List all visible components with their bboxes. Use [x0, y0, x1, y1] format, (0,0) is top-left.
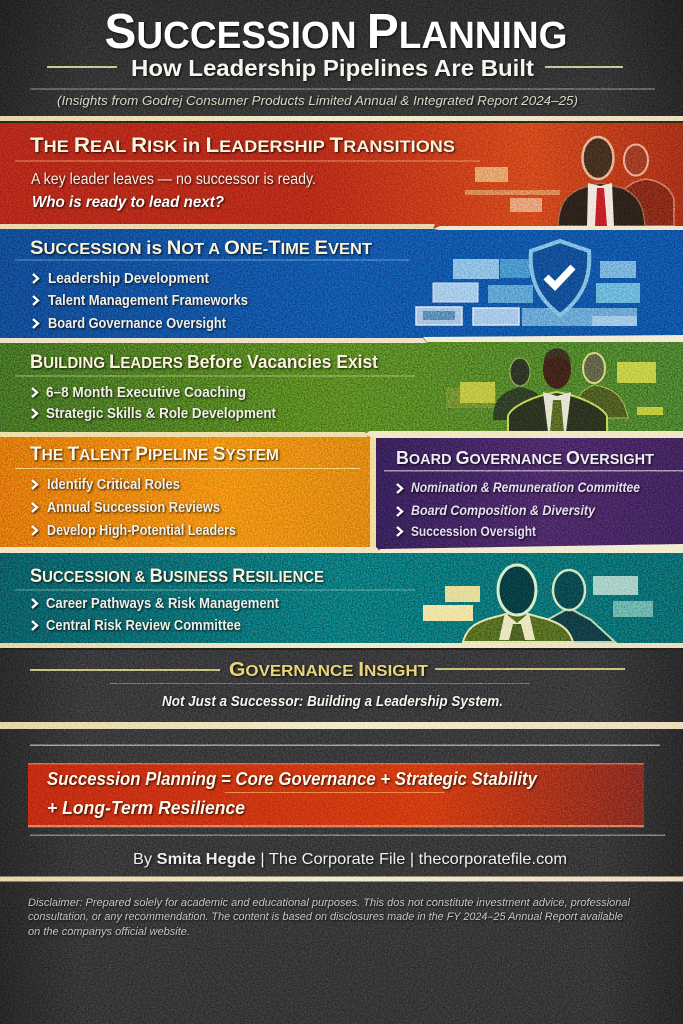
list: coaching bullets: 6–8 Month Executive Coaching [46, 385, 246, 401]
text: insight line: Not Just a Successor: Building a Leadership System. [162, 693, 503, 710]
heading: real risk: THE REAL RISK in LEADERSHIP TRANSITIONS [30, 134, 455, 157]
divider band [0, 876, 683, 882]
panel: blue not a one-time event [0, 228, 683, 340]
list: board bullets: Succession Oversight [411, 523, 536, 539]
decorative bands [0, 116, 683, 650]
list: event bullets: Board Governance Oversight [48, 316, 226, 332]
header [30, 5, 655, 108]
disclaimer [28, 897, 631, 938]
list: event bullets: Talent Management Frameworks [48, 293, 248, 309]
disclaimer: consultation, or any recommendation. The content is based on disclosures made in the FY 2024–25 Annual Report available [28, 911, 623, 923]
list: board bullets: Board Composition & Diversity [411, 502, 596, 518]
list: resilience bullets: Central Risk Review Committee [46, 618, 241, 634]
list: pipeline bullets: Identify Critical Roles [47, 477, 180, 493]
illustration: shield and framework boxes [416, 241, 640, 326]
heading: building leaders: BUILDING LEADERS Before Vacancies Exist [30, 352, 378, 373]
list: event bullets: Leadership Development [48, 271, 209, 287]
panel: green building leaders [0, 340, 683, 436]
list: coaching bullets: Strategic Skills & Role Development [46, 406, 276, 422]
illustration: three leaders [446, 348, 663, 432]
heading: resilience: SUCCESSION & BUSINESS RESILIENCE [30, 566, 324, 587]
list: resilience bullets: Career Pathways & Risk Management [46, 596, 279, 612]
heading: talent pipeline: THE TALENT PIPELINE SYSTEM [30, 444, 279, 465]
subtitle: How Leadership Pipelines Are Built [131, 55, 534, 81]
title: SUCCESSION PLANNING [104, 5, 568, 59]
byline: By Smita Hegde | The Corporate File | thecorporatefile.com [133, 851, 567, 868]
list: coaching bullets [32, 385, 276, 422]
list: resilience bullets [32, 596, 279, 634]
panel: red real risk [0, 122, 683, 228]
list: pipeline bullets [32, 477, 236, 539]
text: risk question: Who is ready to lead next? [32, 194, 225, 211]
heading: one-time event: SUCCESSION is NOT A ONE-TIME EVENT [30, 238, 373, 259]
text: equation line one: Succession Planning = Core Governance + Strategic Stability [47, 768, 539, 789]
governance insight [30, 659, 625, 710]
list: pipeline bullets: Annual Succession Reviews [47, 500, 220, 516]
text: equation line two: + Long-Term Resilience [47, 797, 245, 818]
panel: orange talent pipeline [0, 436, 372, 550]
disclaimer: Disclaimer: Prepared solely for academic and educational purposes. This dos not constitute investment advice, professional [28, 897, 631, 909]
panel: teal resilience [0, 550, 683, 645]
callout: succession equation [28, 763, 644, 828]
heading: governance insight: GOVERNANCE INSIGHT [229, 659, 428, 681]
list: pipeline bullets: Develop High-Potential Leaders [47, 523, 236, 539]
source note: (Insights from Godrej Consumer Products Limited Annual & Integrated Report 2024–25) [57, 93, 578, 108]
panel: purple board governance [376, 438, 683, 550]
disclaimer: on the companys official website. [28, 926, 190, 938]
list: event bullets [33, 271, 248, 332]
heading: board governance: BOARD GOVERNANCE OVERSIGHT [396, 447, 654, 468]
text: risk statement: A key leader leaves — no successor is ready. [31, 171, 316, 188]
illustration: leader figures [465, 137, 674, 226]
list: board bullets: Nomination & Remuneration Committee [411, 479, 640, 495]
divider band [0, 722, 683, 729]
illustration: two leaders and charts [423, 565, 653, 642]
list: board bullets [397, 479, 640, 539]
